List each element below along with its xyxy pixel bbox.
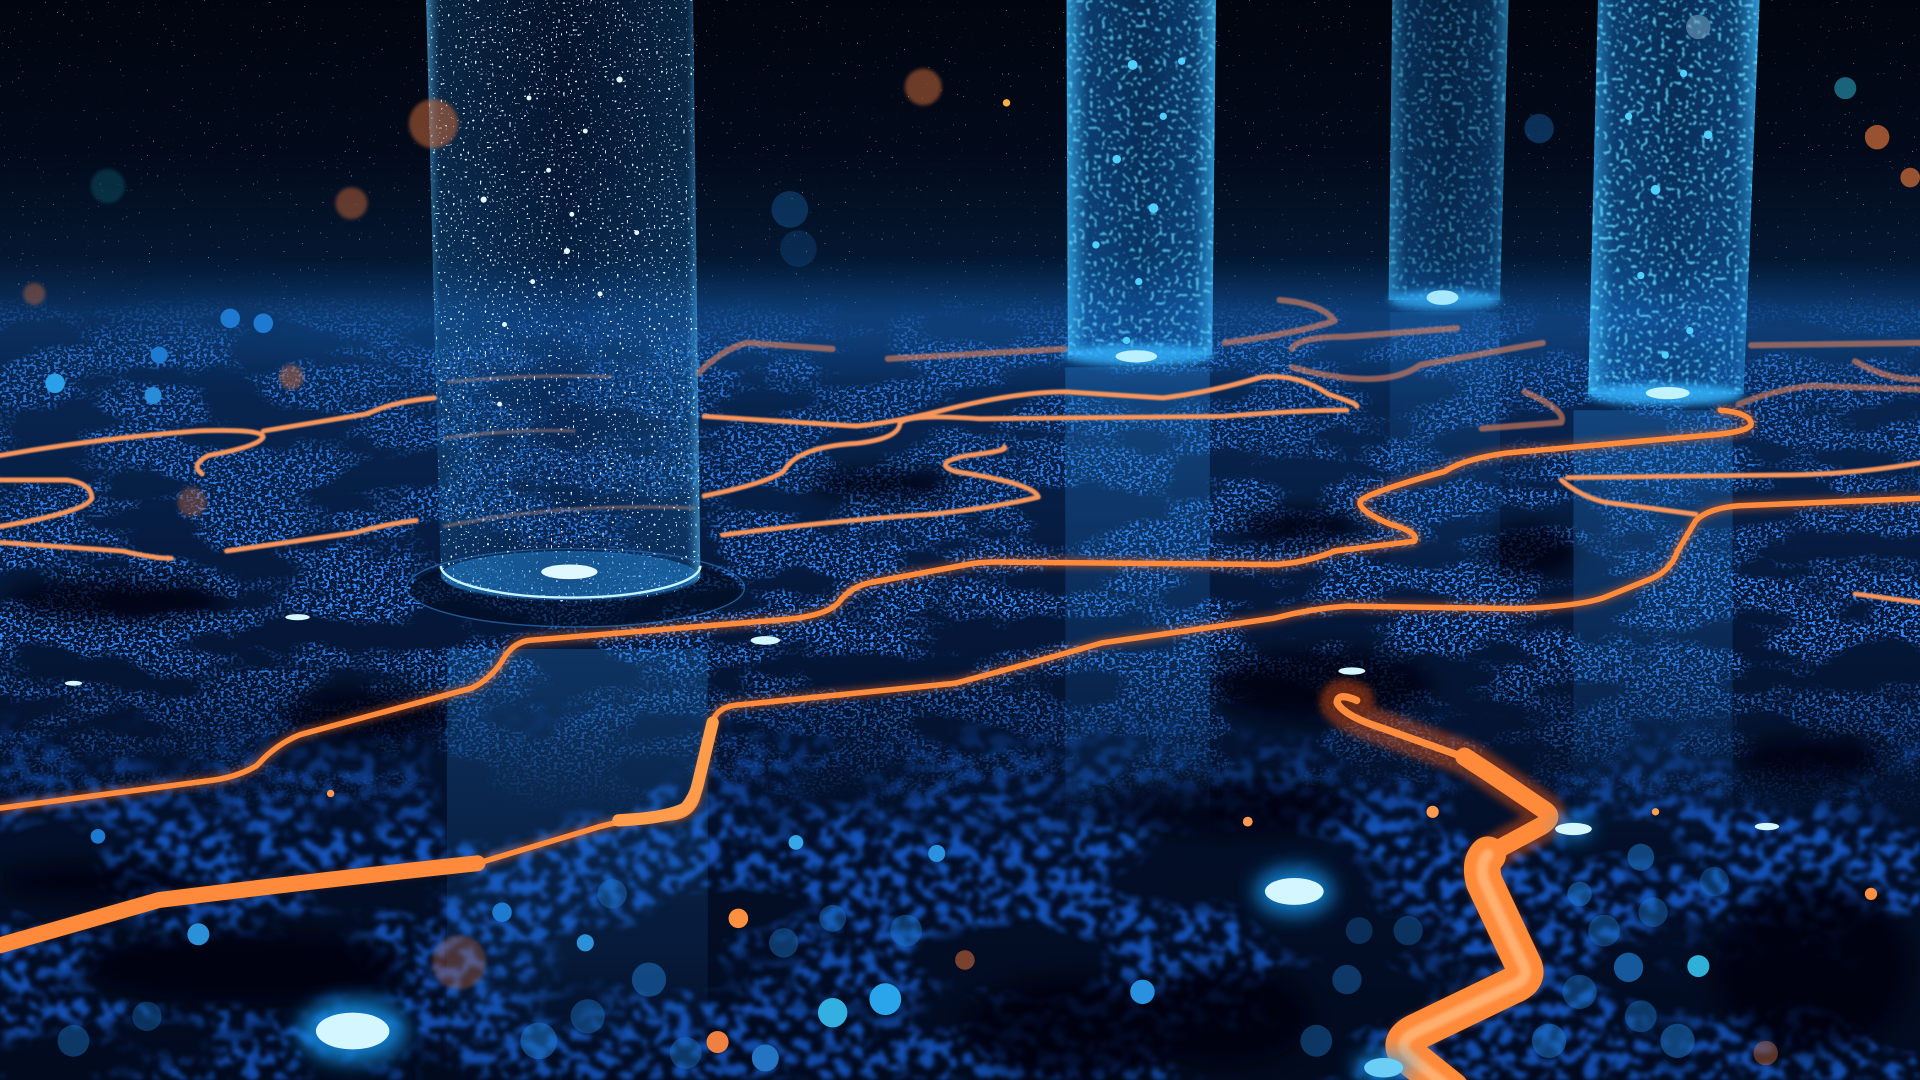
dark floor patches [0,469,1910,1080]
trace: thick foreground route glow [1337,697,1549,1080]
floor speckle far [0,298,1920,806]
circuit traces: orange glowing lines [0,300,1920,1080]
floor speckle near [0,698,1920,1080]
pillar 2 [1063,0,1218,366]
trace: main route B [0,498,1920,945]
trace glow [0,410,1920,945]
glowing floor nodes [65,614,1779,1080]
pillar 1 bright stars [481,77,639,407]
starfield [0,0,1920,306]
trace: main route A [0,410,1751,808]
horizon haze [122,294,1920,367]
pillar reflections [447,312,1733,1080]
pillar 4 bright dots [1625,70,1712,359]
pillar 2 bright dots [1092,58,1185,344]
node halos [299,819,1593,1080]
pillar 3 [1384,0,1512,310]
trace: thick foreground route [1337,697,1549,1080]
pillar 4 [1586,0,1763,405]
pillar 1: tall glass cylinder [407,0,744,627]
node cores [65,614,1779,1078]
trace: far lines [698,300,1920,429]
trace: middle lines [0,377,1920,602]
trace: route B thick sections [0,722,713,945]
